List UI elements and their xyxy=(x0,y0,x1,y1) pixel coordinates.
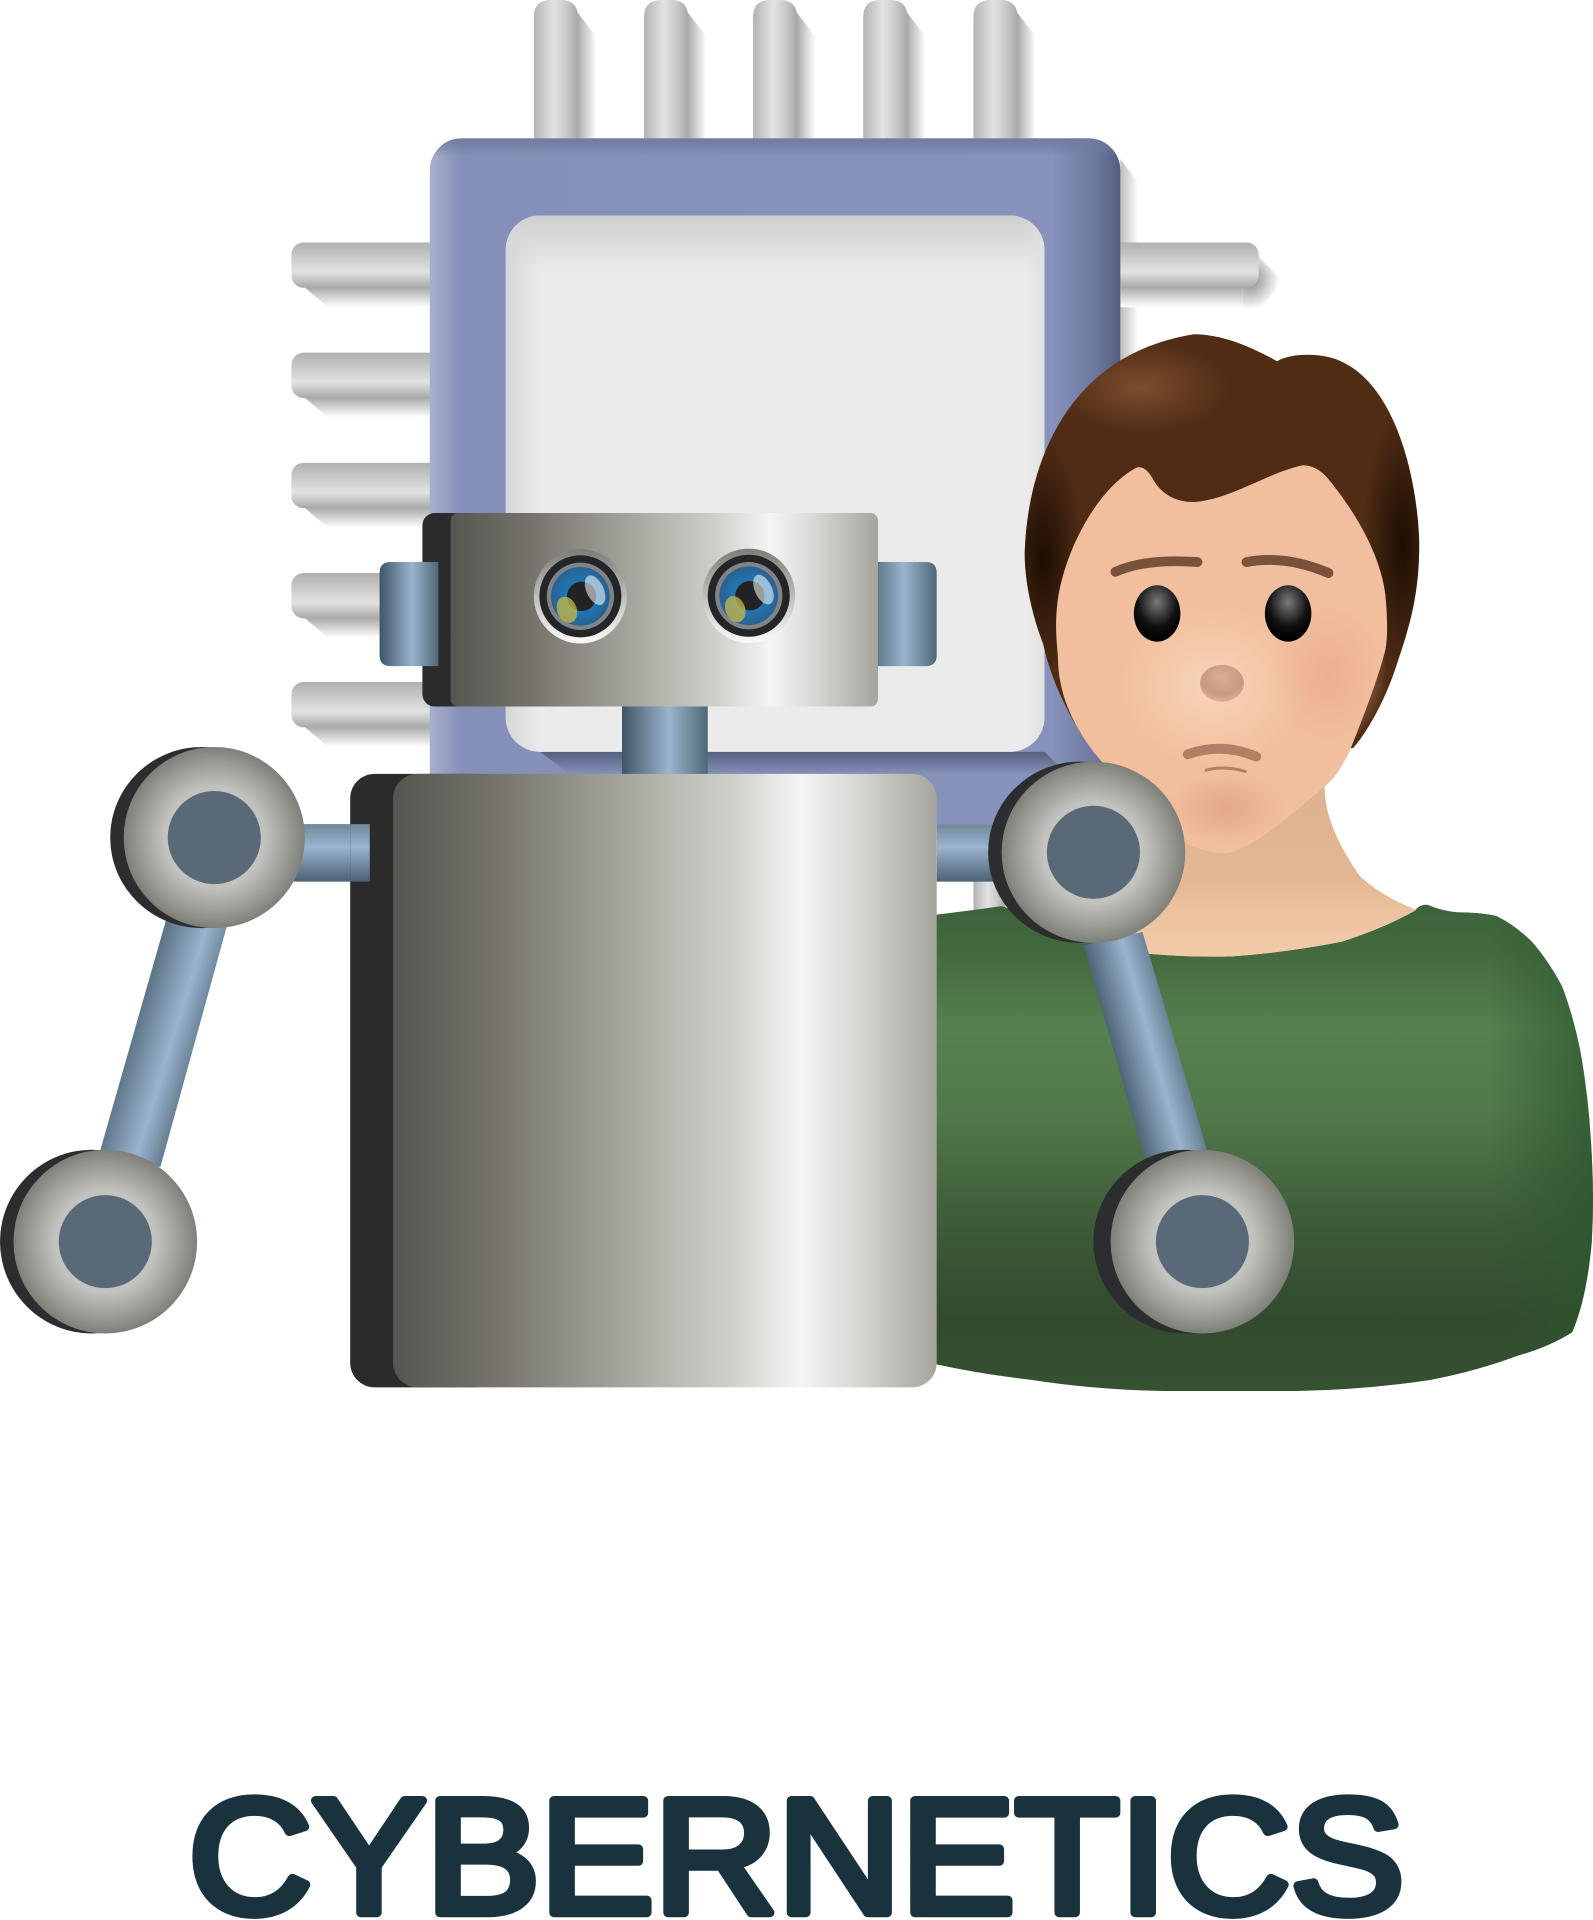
neck xyxy=(1102,759,1417,957)
eyebrows xyxy=(1115,561,1198,572)
lower left joint xyxy=(0,1150,197,1333)
nose xyxy=(1200,665,1244,702)
robot arms xyxy=(100,824,1207,1167)
chip body xyxy=(430,138,1120,824)
face xyxy=(1056,465,1387,853)
mouth xyxy=(1188,749,1256,771)
hair xyxy=(1004,334,1441,752)
left ear xyxy=(380,562,438,666)
upper right joint xyxy=(988,762,1185,943)
person xyxy=(935,334,1593,1391)
robot head xyxy=(380,513,937,707)
robot torso xyxy=(350,774,937,1387)
eyes xyxy=(1134,585,1311,642)
right eye xyxy=(702,549,795,643)
robot xyxy=(0,513,1294,1387)
chip inner panel xyxy=(506,216,1068,774)
shirt xyxy=(935,905,1593,1391)
left eye xyxy=(534,549,627,643)
upper left joint xyxy=(110,747,305,928)
lower right joint xyxy=(1093,1150,1294,1333)
chip pins with shadows xyxy=(291,0,1281,918)
robot neck xyxy=(622,698,708,776)
right ear xyxy=(863,562,937,666)
